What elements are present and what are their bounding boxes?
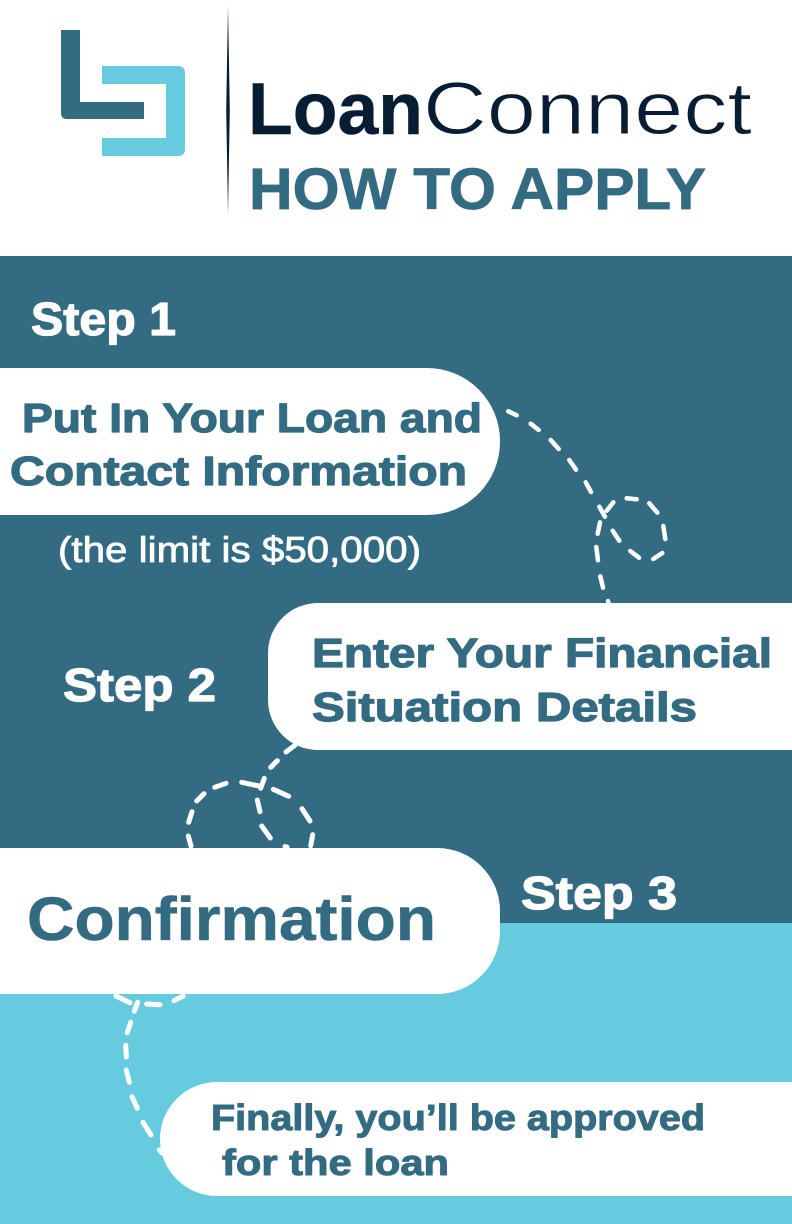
dashed connector: step 2 to step 3 — [188, 745, 313, 847]
step 1 card — [0, 368, 500, 515]
dashed connector: step 1 to step 2 — [508, 411, 665, 603]
step 3 card: Confirmation — [27, 885, 436, 953]
step 1 card: Put In Your Loan and — [22, 395, 482, 441]
light background panel — [0, 923, 792, 1224]
step 1 card: Contact Information — [10, 448, 467, 494]
step 2 card: Situation Details — [312, 684, 697, 730]
title: HOW TO APPLY — [249, 157, 706, 222]
step 1 label: Step 1 — [31, 293, 176, 345]
step 2 card — [268, 603, 792, 750]
step 2 label: Step 2 — [63, 659, 216, 711]
wordmark: Connect — [423, 67, 753, 150]
header logo icon — [61, 30, 185, 156]
final card: Finally, you’ll be approved — [211, 1097, 705, 1138]
step 3 card — [0, 848, 500, 994]
dark background panel — [0, 256, 792, 923]
header divider — [226, 6, 230, 214]
wordmark — [248, 67, 753, 150]
step 2 card: Enter Your Financial — [312, 630, 772, 676]
wordmark: Loan — [248, 69, 423, 150]
final card: for the loan — [222, 1142, 449, 1183]
dashed connector: step 3 to final — [116, 996, 183, 1153]
final card — [160, 1082, 792, 1196]
step 3 label: Step 3 — [521, 867, 677, 919]
step 1 note: (the limit is $50,000) — [58, 529, 421, 570]
